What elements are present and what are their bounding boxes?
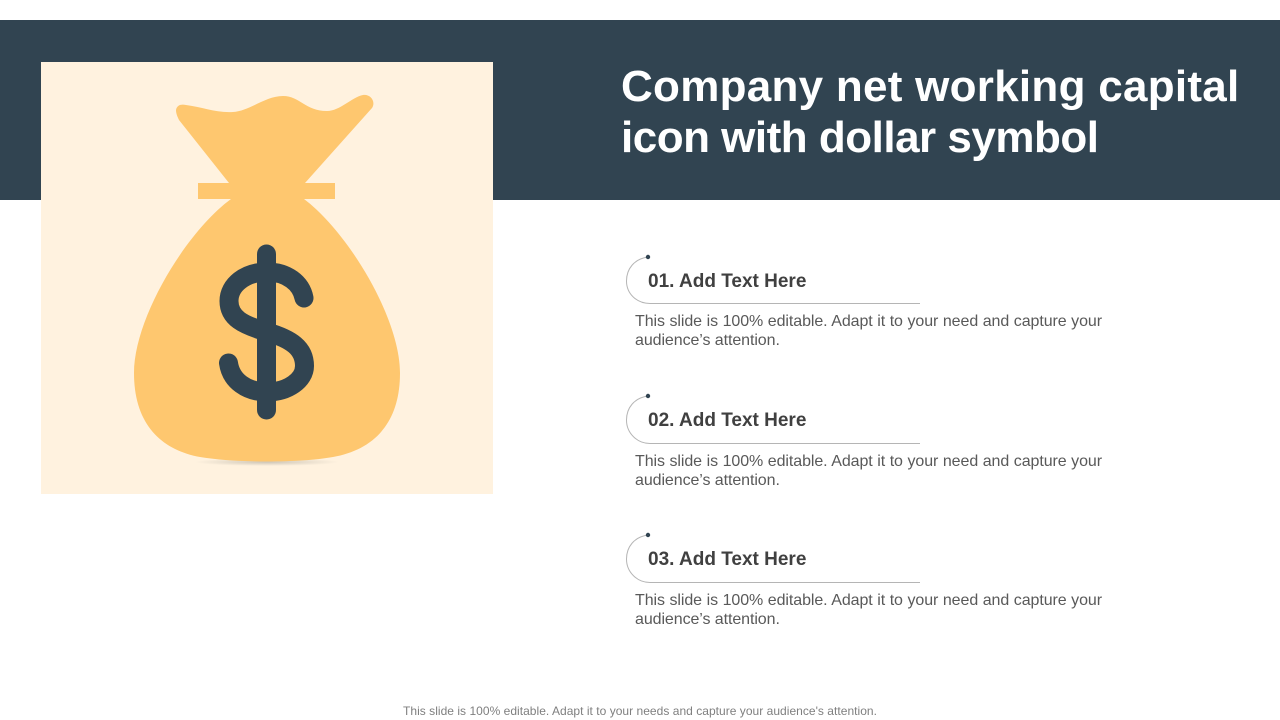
text 01: This slide is 100% editable. Adapt it to your need and capture your audience’s attention. [635, 313, 1102, 349]
header band [0, 20, 1280, 200]
item 03 [626, 532, 1102, 628]
panel: money bag image [41, 62, 493, 494]
text 02: This slide is 100% editable. Adapt it to your need and capture your audience’s attention. [635, 453, 1102, 489]
title: Company net working capital [621, 62, 1240, 111]
title [621, 62, 1240, 162]
item 02 [626, 394, 1102, 489]
item 01 [626, 254, 1102, 349]
connector arc 03 [626, 532, 920, 583]
title: icon with dollar symbol [621, 113, 1098, 162]
heading 03: 03. Add Text Here [648, 549, 806, 570]
text 03: This slide is 100% editable. Adapt it to your need and capture your audience’s attention. [635, 592, 1102, 628]
heading 02: 02. Add Text Here [648, 410, 806, 431]
heading 01: 01. Add Text Here [648, 271, 806, 292]
connector arc 02 [626, 394, 920, 444]
footer note: This slide is 100% editable. Adapt it to your needs and capture your audience's attention. [403, 704, 877, 718]
connector arc 01 [626, 254, 920, 304]
